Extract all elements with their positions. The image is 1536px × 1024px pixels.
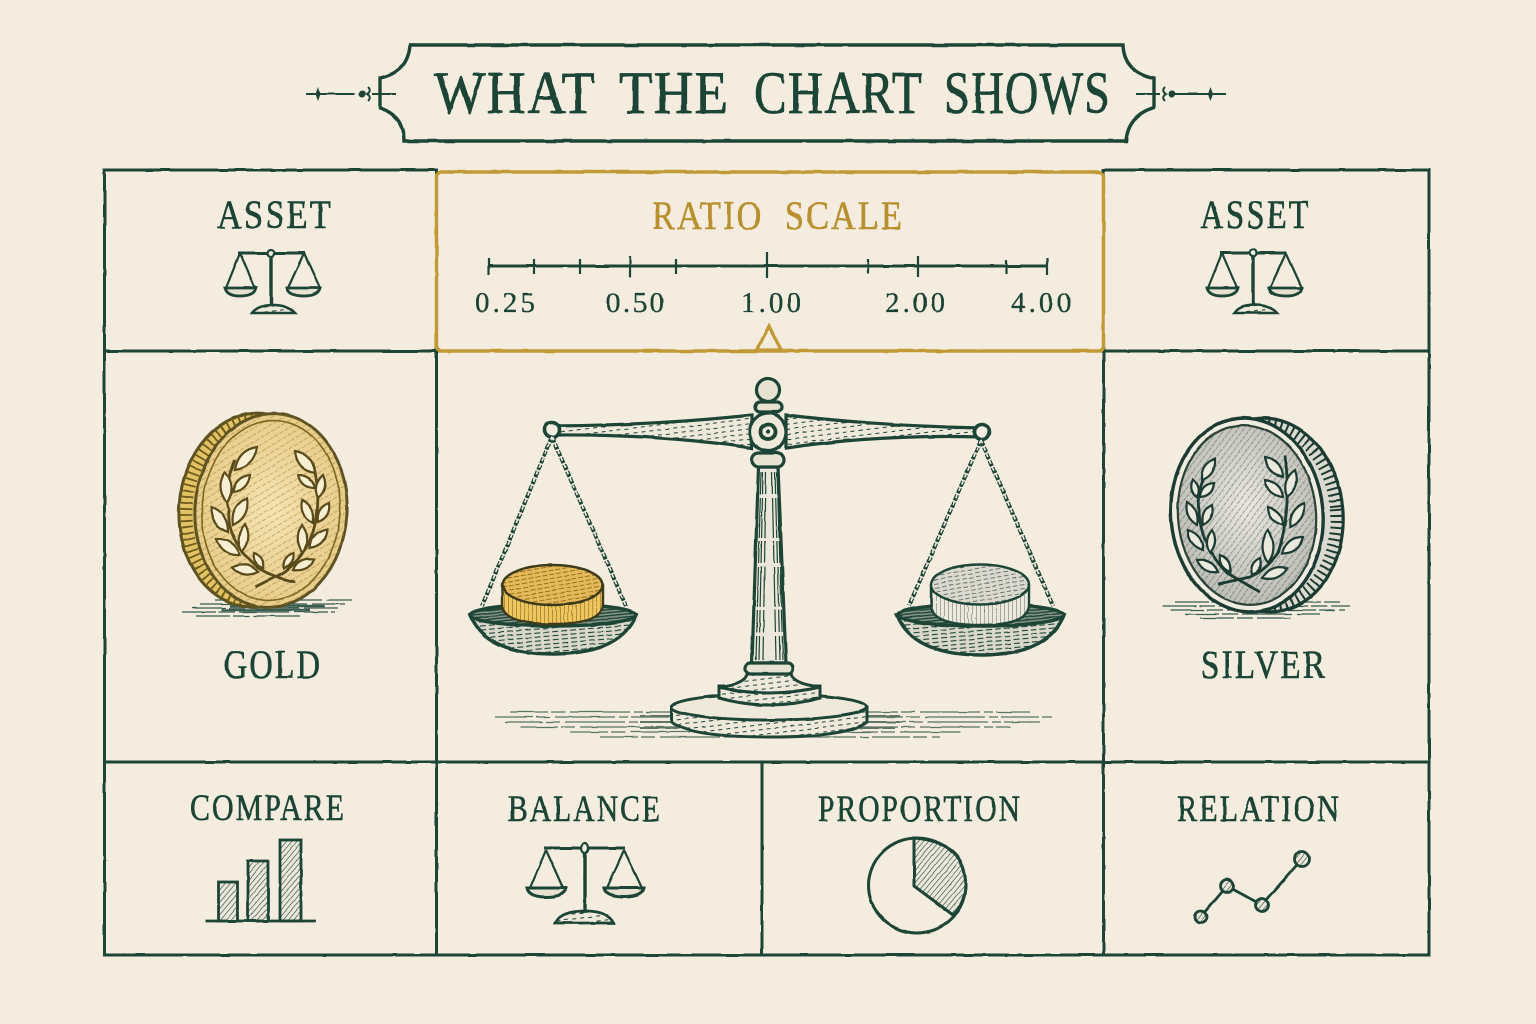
title banner xyxy=(306,45,1226,141)
panel: relation xyxy=(1104,762,1429,955)
coin shadow xyxy=(1162,602,1350,618)
plaque frame xyxy=(380,45,1154,141)
scale labels: 1.00 xyxy=(741,287,801,319)
silver laurel wreath xyxy=(1186,455,1304,592)
base xyxy=(672,674,867,737)
icon: balance scale xyxy=(1207,250,1302,313)
gold coin on pan xyxy=(502,565,603,624)
scale labels: 0.25 xyxy=(475,287,535,319)
heading: compare: COMPARE xyxy=(190,788,346,829)
icon: gold coin xyxy=(172,408,354,613)
panel: right asset header xyxy=(1104,170,1429,351)
title text: THE xyxy=(619,60,729,126)
scale labels: 4.00 xyxy=(1011,287,1071,319)
panel: balance xyxy=(436,762,762,955)
panel: left asset header xyxy=(104,170,436,351)
beam xyxy=(544,378,990,467)
title text xyxy=(434,60,1111,126)
gold laurel wreath xyxy=(211,447,329,587)
icon: silver coin xyxy=(1163,412,1351,618)
icon: line chart xyxy=(1195,852,1310,923)
icon: balance scale xyxy=(527,843,644,923)
panel: central balance scale xyxy=(436,351,1104,762)
icon: bar chart xyxy=(206,840,316,921)
pointer triangle xyxy=(757,326,781,350)
panel: silver xyxy=(1104,351,1429,762)
scale axis with ticks xyxy=(488,252,1047,278)
right pan xyxy=(897,604,1064,655)
scale labels: 2.00 xyxy=(885,287,945,319)
panel: proportion xyxy=(762,762,1104,955)
panel: gold xyxy=(104,351,436,762)
right chains xyxy=(909,440,1053,606)
heading: asset: ASSET xyxy=(1200,192,1311,237)
left chains xyxy=(482,437,626,606)
icon: pie chart xyxy=(868,838,966,933)
right flourish xyxy=(1136,87,1226,101)
panel: compare xyxy=(104,762,436,955)
scale labels: 0.50 xyxy=(606,287,664,319)
icon: balance scale xyxy=(225,250,320,313)
ground shading xyxy=(495,712,1052,737)
silver coin on pan xyxy=(931,564,1029,625)
heading: proportion: PROPORTION xyxy=(818,789,1022,830)
left flourish xyxy=(306,87,396,101)
column xyxy=(746,467,793,674)
title text: CHART xyxy=(754,60,923,126)
finial xyxy=(756,378,780,402)
heading: ratio scale: RATIO SCALE xyxy=(652,193,904,238)
title text: WHAT xyxy=(434,60,596,126)
panel: ratio scale xyxy=(436,172,1104,351)
label: silver: SILVER xyxy=(1201,642,1327,687)
central hub xyxy=(750,413,786,451)
scale labels xyxy=(475,287,1071,319)
heading: relation: RELATION xyxy=(1177,789,1341,830)
heading: balance: BALANCE xyxy=(508,789,662,830)
coin shadow xyxy=(182,600,352,616)
heading: asset: ASSET xyxy=(217,192,333,237)
label: gold: GOLD xyxy=(224,642,322,687)
left pan xyxy=(470,604,636,654)
title text: SHOWS xyxy=(944,60,1111,126)
